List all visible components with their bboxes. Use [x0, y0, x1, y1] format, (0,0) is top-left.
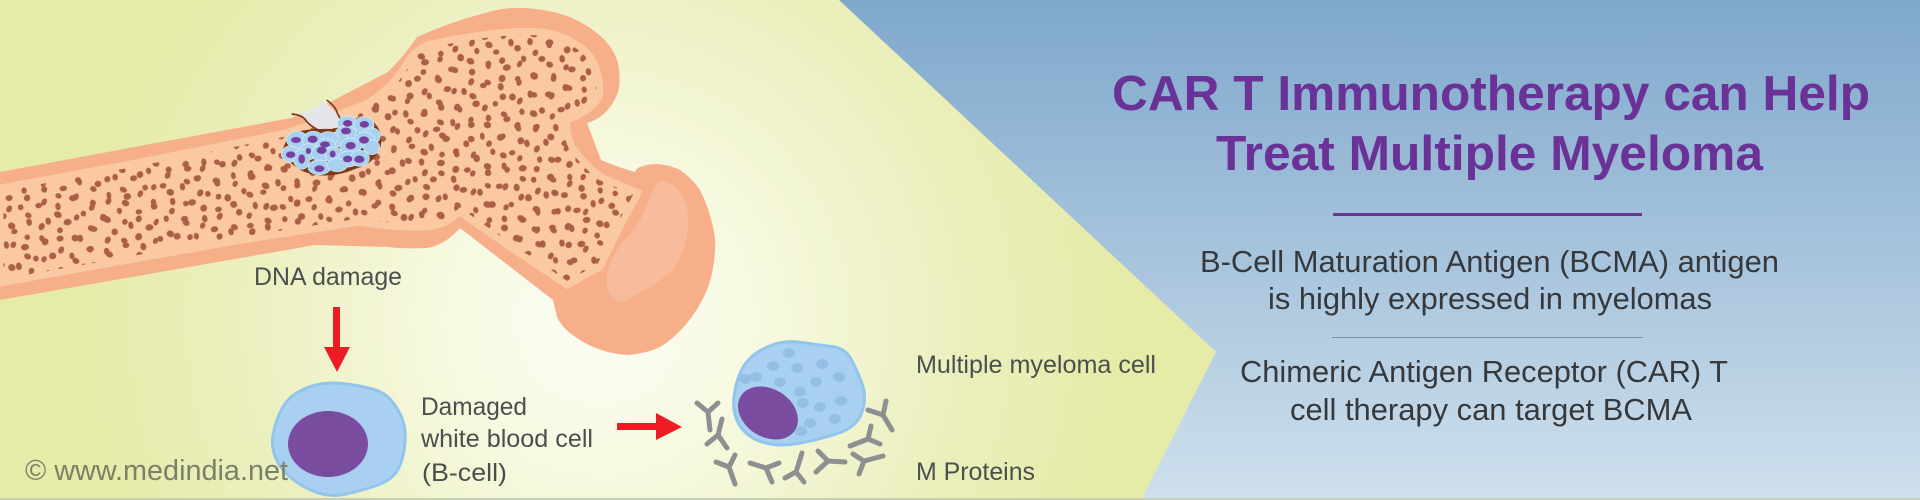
text block: BCMA antigen — [1200, 244, 1779, 316]
cracks — [292, 100, 342, 130]
bone illustration — [0, 8, 715, 355]
arrow: to myeloma cell — [617, 413, 682, 440]
text block: CAR T cell therapy: Chimeric Antigen Receptor (CAR) T — [1240, 354, 1728, 389]
title: CAR T Immunotherapy can Help — [1112, 66, 1870, 121]
title — [1112, 66, 1870, 181]
bone marrow with specks — [0, 31, 638, 285]
brown lesion cavity — [283, 117, 381, 175]
bottom edge strip — [0, 498, 1920, 500]
thin divider — [1332, 337, 1643, 338]
label: damaged white blood cell — [420, 393, 593, 487]
label: DNA damage: DNA damage — [254, 263, 402, 291]
label: damaged white blood cell: (B-cell) — [422, 459, 507, 487]
myeloma cell cluster — [281, 116, 380, 175]
panel: yellow-green arrow-shaped background — [0, 0, 1216, 500]
text block: BCMA antigen: B-Cell Maturation Antigen (BCMA) antigen — [1200, 244, 1779, 279]
label: M proteins: M Proteins — [916, 458, 1035, 486]
icon: multiple myeloma cell — [728, 342, 864, 450]
icon: M proteins antibodies — [697, 401, 892, 484]
femoral head highlight — [607, 181, 688, 302]
fractured bone fragment — [300, 102, 342, 129]
label: damaged white blood cell: Damaged — [421, 393, 527, 421]
icon: damaged white blood cell — [272, 383, 405, 495]
label: multiple myeloma cell: Multiple myeloma cell — [916, 351, 1156, 379]
text block: BCMA antigen: is highly expressed in myelomas — [1268, 281, 1712, 316]
bone outer layer — [0, 8, 715, 355]
purple divider — [1333, 213, 1642, 216]
title: Treat Multiple Myeloma — [1216, 126, 1763, 181]
watermark: © www.medindia.net — [25, 455, 288, 487]
label: damaged white blood cell: white blood cell — [420, 425, 593, 453]
text block: CAR T cell therapy — [1240, 354, 1728, 427]
text block: CAR T cell therapy: cell therapy can target BCMA — [1290, 392, 1692, 427]
arrow: down to B-cell — [324, 307, 350, 372]
tumour lesion in bone — [281, 100, 381, 175]
